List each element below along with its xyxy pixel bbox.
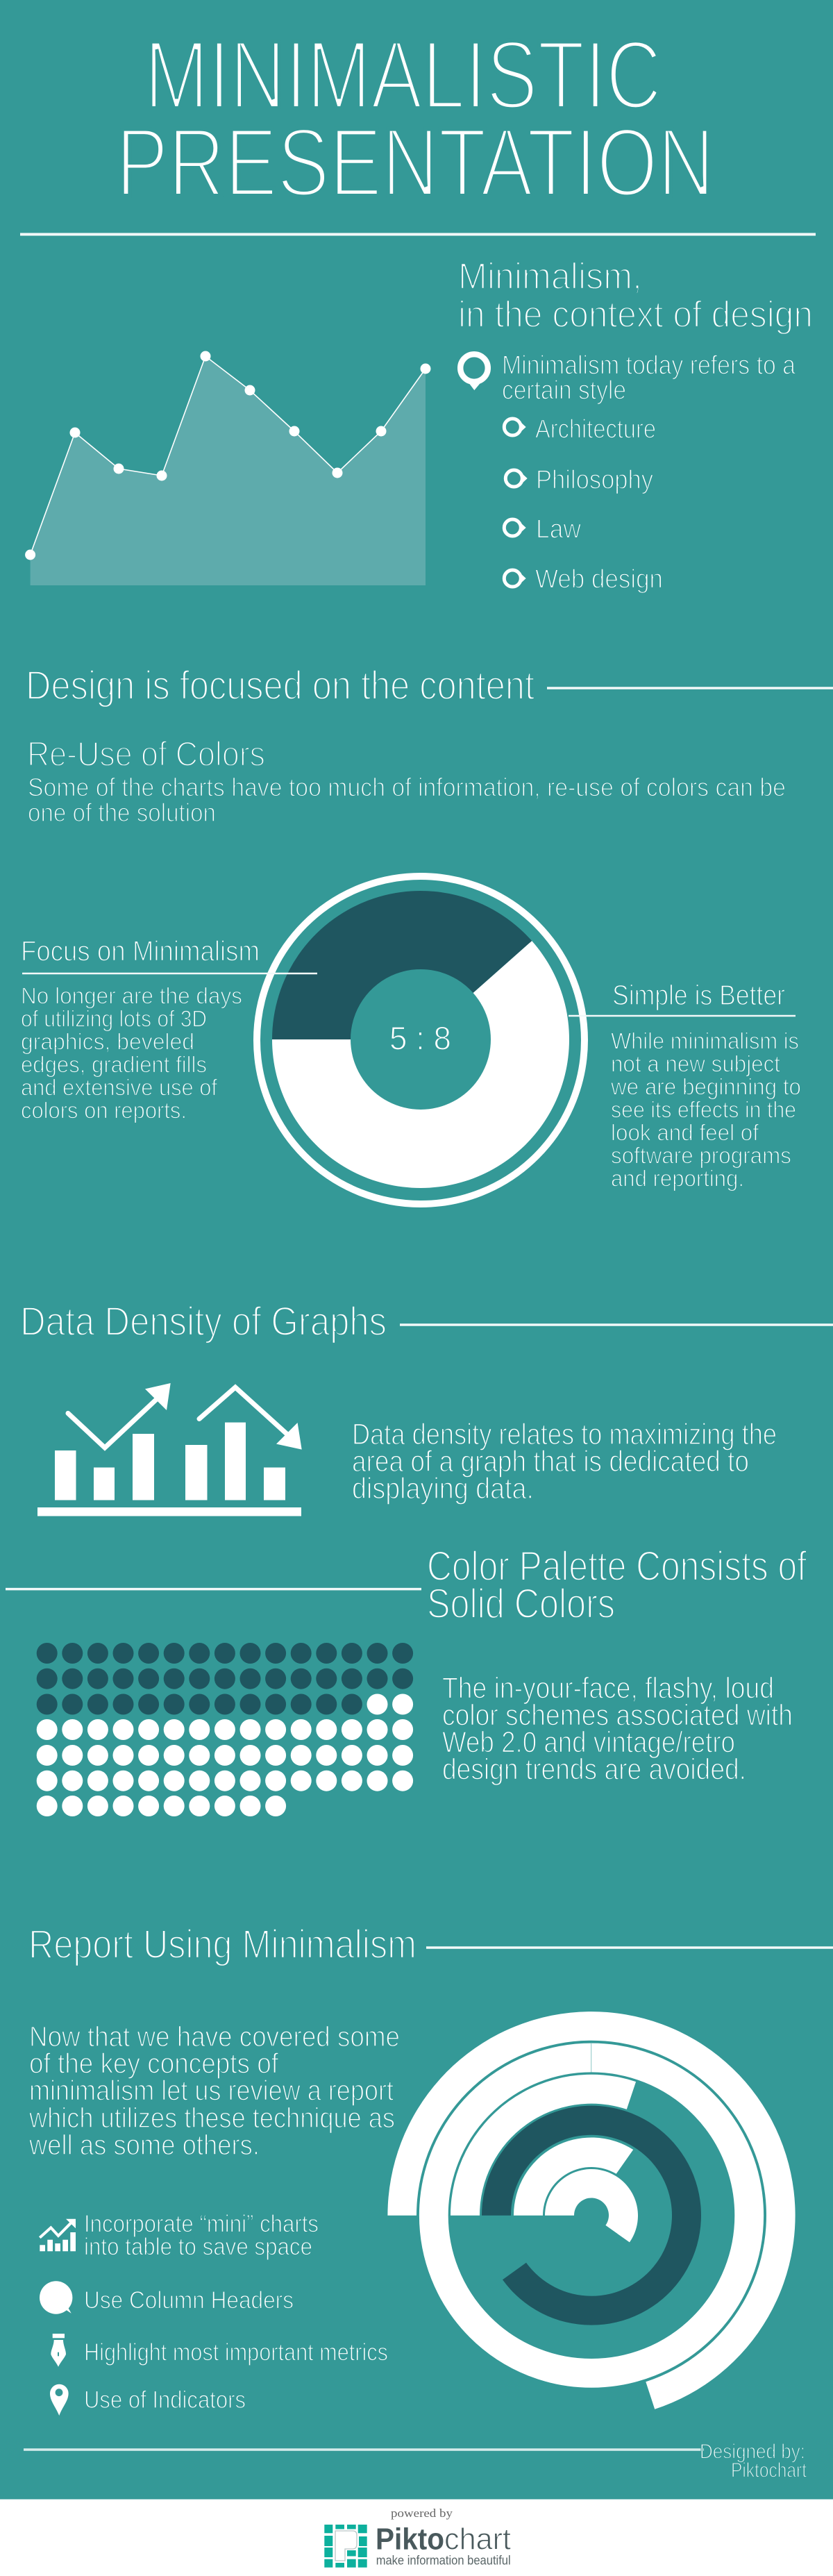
text: re-use of colors: Some of the charts have too much of information, re-use of colors can be bbox=[28, 773, 786, 801]
panel: simple is better bbox=[569, 979, 801, 1191]
heading: design is focused on the content: Design is focused on the content bbox=[26, 663, 535, 708]
text: re-use of colors bbox=[28, 773, 786, 827]
panel: simple is better: look and feel of bbox=[611, 1119, 759, 1146]
text: re-use of colors: one of the solution bbox=[28, 798, 216, 827]
list item: law: Law bbox=[536, 515, 582, 544]
title bbox=[116, 20, 714, 217]
text: color palette: Web 2.0 and vintage/retro bbox=[442, 1726, 735, 1759]
panel: simple is better: While minimalism is bbox=[611, 1028, 799, 1054]
donut chart 5:8 bbox=[257, 876, 584, 1204]
list item: architecture: Architecture bbox=[535, 415, 656, 444]
list item: column headers: Use Column Headers bbox=[84, 2287, 294, 2314]
text: report intro: of the key concepts of bbox=[29, 2047, 279, 2079]
intro text: certain style bbox=[502, 376, 626, 405]
footer: powered by piktochart bbox=[0, 2500, 833, 2576]
area chart bbox=[25, 351, 431, 585]
panel: simple is better: see its effects in the bbox=[611, 1097, 796, 1122]
footer: powered by piktochart: chart bbox=[444, 2522, 511, 2557]
panel: focus on minimalism: of utilizing lots of 3D bbox=[21, 1005, 207, 1032]
list item: law bbox=[504, 515, 582, 544]
panel: simple is better: Simple is Better bbox=[612, 979, 785, 1011]
icon: fountain pen bbox=[51, 2334, 66, 2367]
text: color palette: The in-your-face, flashy, loud bbox=[442, 1672, 774, 1705]
credit: designed by: Piktochart bbox=[731, 2459, 807, 2482]
list item: mini charts: Incorporate “mini” charts bbox=[84, 2211, 319, 2237]
icon: speech bubble bbox=[40, 2281, 72, 2314]
list item: highlight metrics: Highlight most important metrics bbox=[84, 2339, 388, 2366]
text: report intro: which utilizes these technique as bbox=[28, 2102, 395, 2134]
heading bbox=[458, 256, 813, 335]
heading: Minimalism, bbox=[458, 256, 642, 297]
panel: focus on minimalism: edges, gradient fills bbox=[21, 1051, 207, 1078]
heading: data density of graphs: Data Density of Graphs bbox=[20, 1299, 387, 1344]
panel: simple is better: and reporting. bbox=[611, 1165, 744, 1191]
panel: focus on minimalism: colors on reports. bbox=[21, 1097, 187, 1123]
text: data density: area of a graph that is dedicated to bbox=[352, 1445, 749, 1478]
panel: focus on minimalism: graphics, beveled bbox=[21, 1029, 194, 1054]
icon: mini chart bbox=[40, 2219, 76, 2251]
list item: indicators: Use of Indicators bbox=[84, 2386, 246, 2414]
panel: simple is better: software programs bbox=[611, 1143, 791, 1168]
panel: simple is better: not a new subject bbox=[611, 1051, 780, 1076]
list item: philosophy: Philosophy bbox=[536, 465, 653, 494]
text: report intro bbox=[28, 2021, 400, 2161]
heading: re-use of colors: Re-Use of Colors bbox=[27, 735, 265, 773]
text: color palette bbox=[442, 1672, 793, 1786]
credit: designed by: Designed by: bbox=[700, 2440, 805, 2464]
text: data density bbox=[352, 1418, 777, 1505]
list item: indicators bbox=[50, 2384, 246, 2416]
panel: focus on minimalism bbox=[21, 935, 317, 1123]
icon: pin bullet bbox=[460, 354, 488, 390]
title: MINIMALISTIC bbox=[144, 20, 662, 129]
text: report intro: Now that we have covered some bbox=[29, 2021, 400, 2052]
list item: mini charts: into table to save space bbox=[84, 2233, 312, 2261]
panel: simple is better: we are beginning to bbox=[610, 1073, 801, 1100]
panel: focus on minimalism: and extensive use of bbox=[21, 1075, 218, 1100]
heading: in the context of design bbox=[458, 294, 813, 335]
heading: report using minimalism: Report Using Minimalism bbox=[28, 1922, 416, 1967]
intro text bbox=[502, 351, 796, 405]
dot matrix 100 dots bbox=[37, 1643, 413, 1816]
icon: bar chart with arrows bbox=[37, 1383, 302, 1516]
heading: color palette bbox=[427, 1543, 807, 1627]
text: report intro: well as some others. bbox=[28, 2129, 260, 2161]
text: report intro: minimalism let us review a report bbox=[29, 2075, 394, 2107]
panel: focus on minimalism: No longer are the days bbox=[21, 983, 242, 1008]
list item: web design: Web design bbox=[535, 565, 663, 594]
footer: powered by piktochart: make information beautiful bbox=[376, 2554, 511, 2568]
credit: designed by bbox=[700, 2440, 807, 2482]
list item: mini charts bbox=[40, 2211, 319, 2261]
text: color palette: design trends are avoided. bbox=[442, 1753, 746, 1786]
radial bar chart bbox=[387, 2012, 796, 2409]
text: data density: displaying data. bbox=[352, 1472, 534, 1505]
panel: focus on minimalism: Focus on Minimalism bbox=[21, 935, 260, 967]
heading: color palette: Solid Colors bbox=[427, 1580, 615, 1627]
icon: piktochart logo bbox=[324, 2525, 367, 2568]
list item: column headers bbox=[40, 2281, 294, 2314]
list item: highlight metrics bbox=[51, 2334, 388, 2367]
panel: minimalism in the context of design bbox=[458, 256, 813, 594]
donut chart 5:8: 5 : 8 bbox=[389, 1019, 451, 1057]
footer: powered by piktochart: Pikto bbox=[376, 2522, 444, 2557]
icon: map pin bbox=[50, 2384, 69, 2416]
intro text: Minimalism today refers to a bbox=[502, 351, 796, 380]
footer: powered by piktochart: powered by bbox=[391, 2507, 453, 2520]
